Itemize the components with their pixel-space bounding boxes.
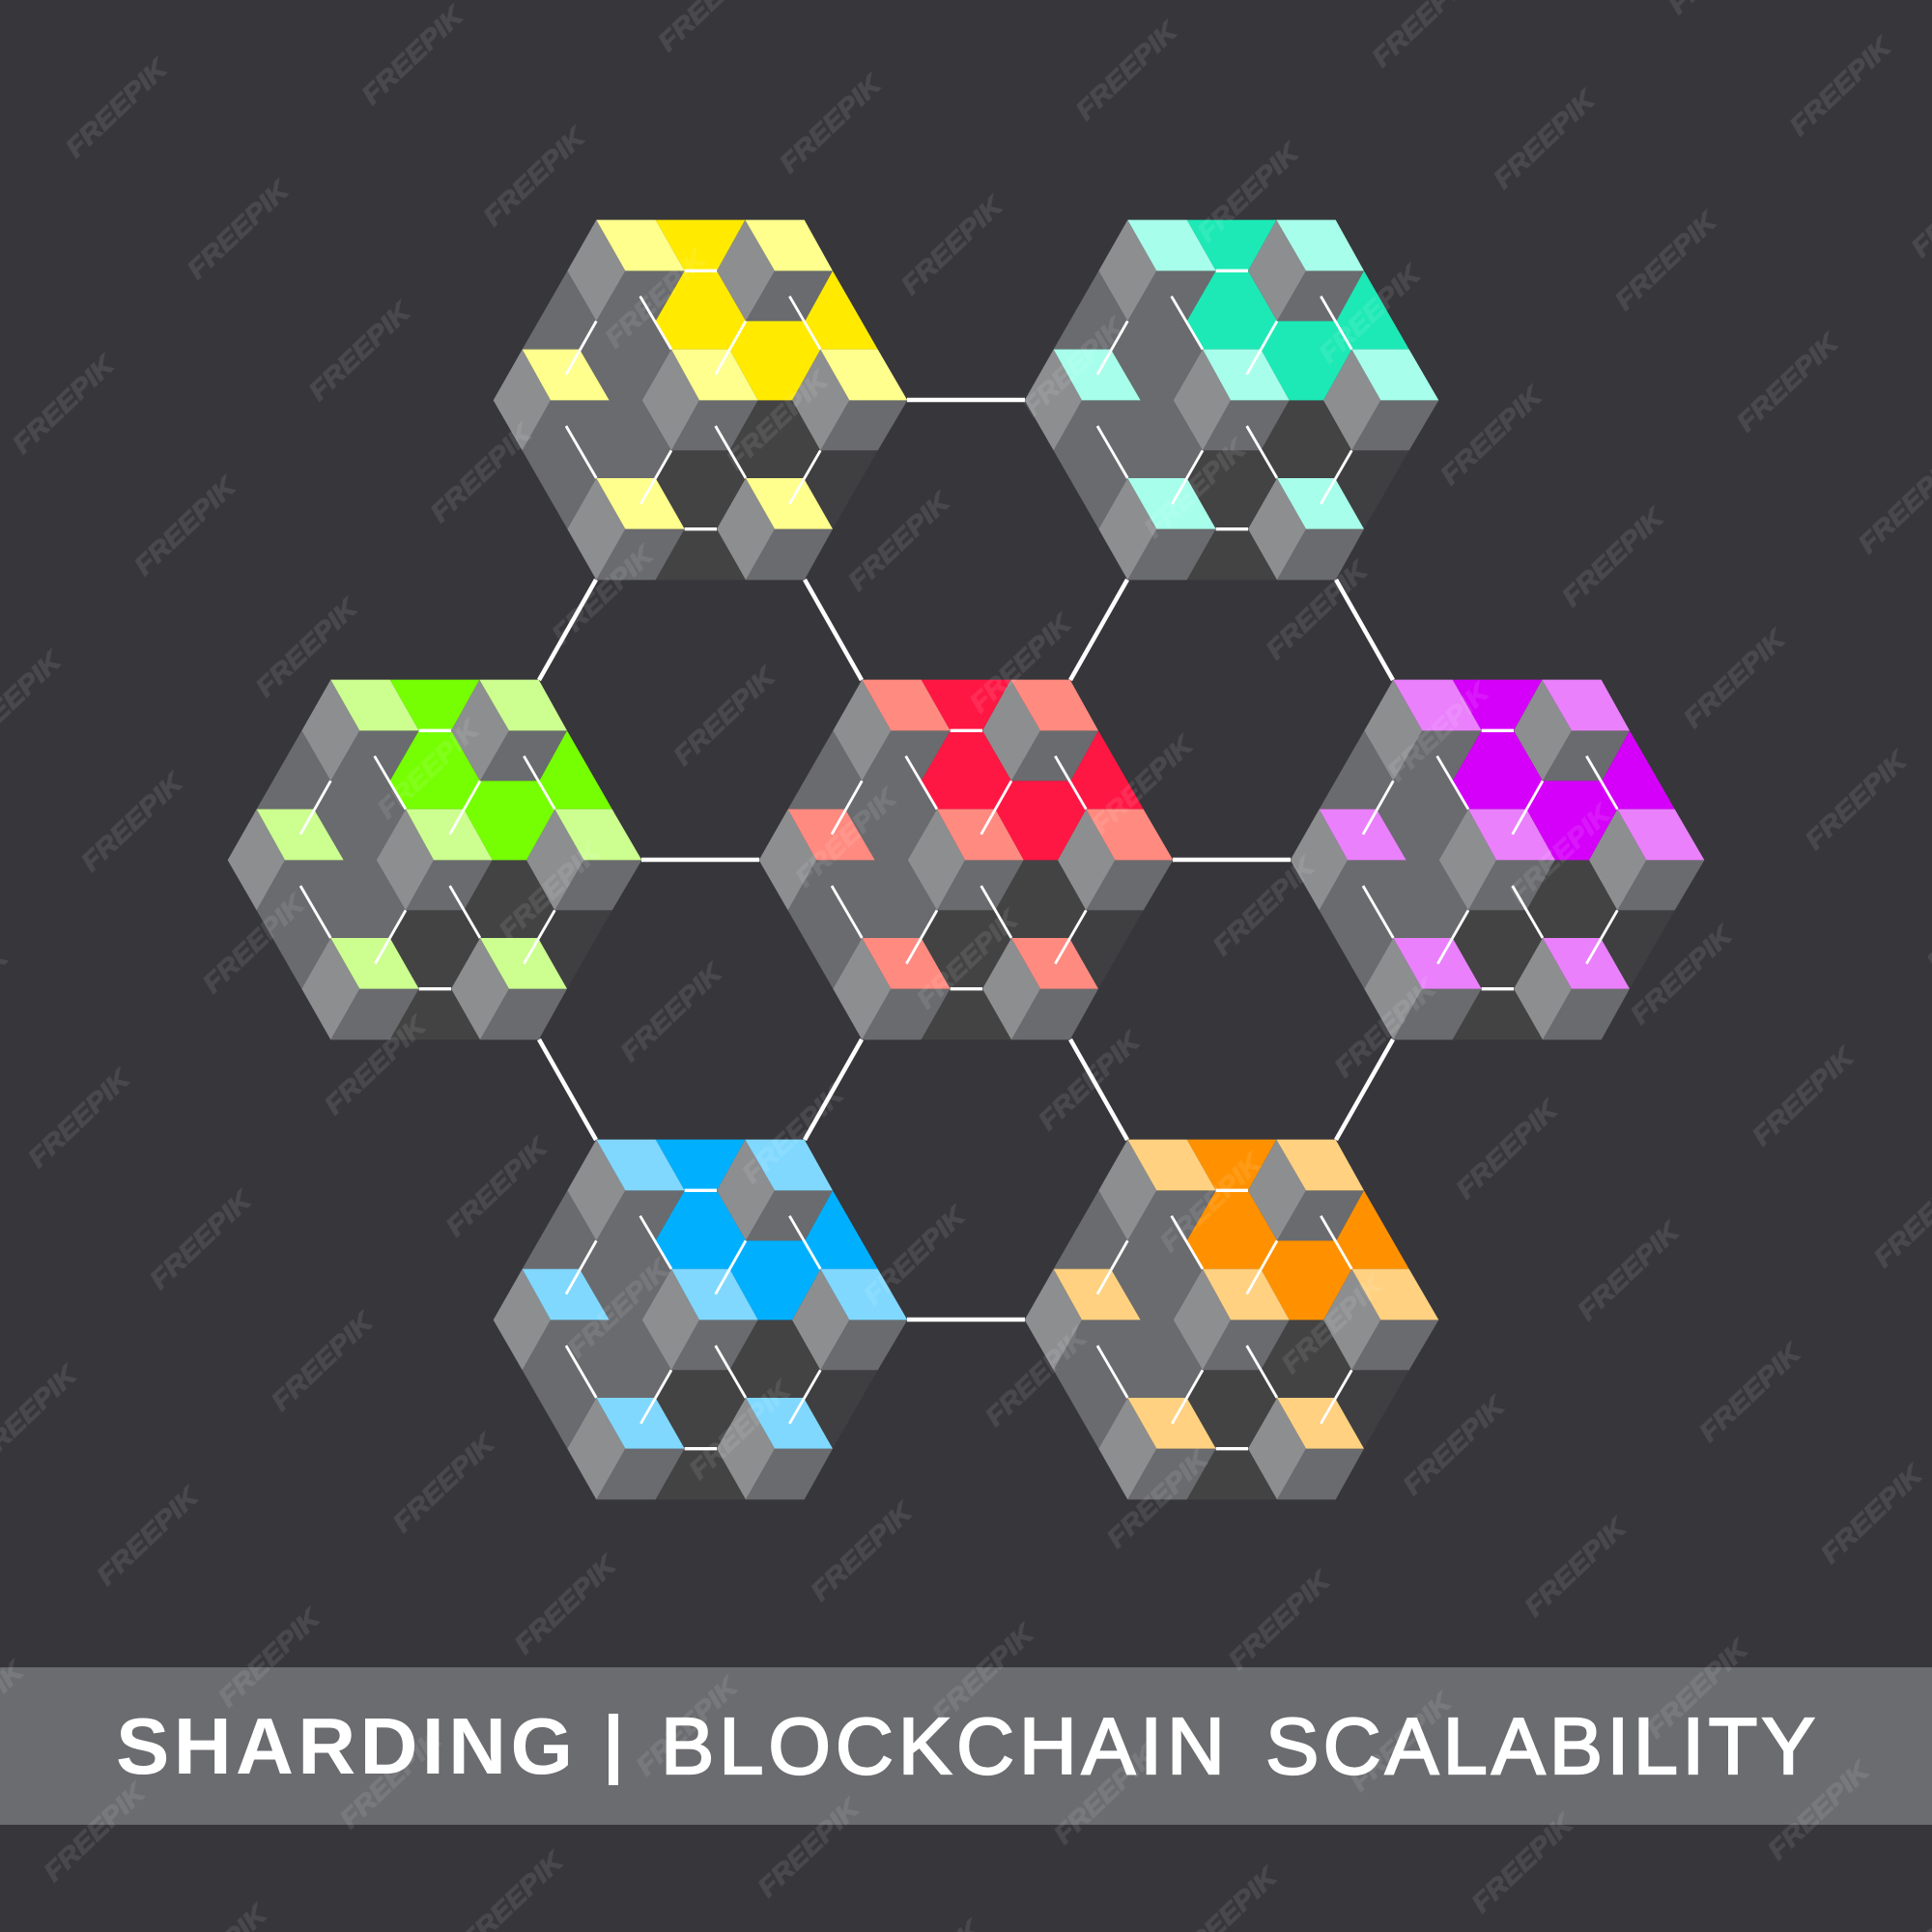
- title text: SCALABILITY: [1265, 1701, 1815, 1791]
- shard hexagon: green: [228, 680, 641, 1039]
- title text: BLOCKCHAIN: [661, 1701, 1225, 1791]
- shard hexagon: blue: [494, 1140, 907, 1499]
- title text: [116, 1701, 1815, 1791]
- shard hexagon: teal: [1025, 220, 1438, 580]
- shard hexagon: red (centre): [759, 680, 1173, 1039]
- title banner: [0, 1667, 1932, 1825]
- shard hexagon: yellow: [494, 220, 907, 580]
- network connector lines: [539, 400, 1393, 1320]
- shard hexagon: orange: [1025, 1140, 1438, 1499]
- shard hexagon: magenta: [1291, 680, 1704, 1039]
- title text: SHARDING: [116, 1701, 573, 1791]
